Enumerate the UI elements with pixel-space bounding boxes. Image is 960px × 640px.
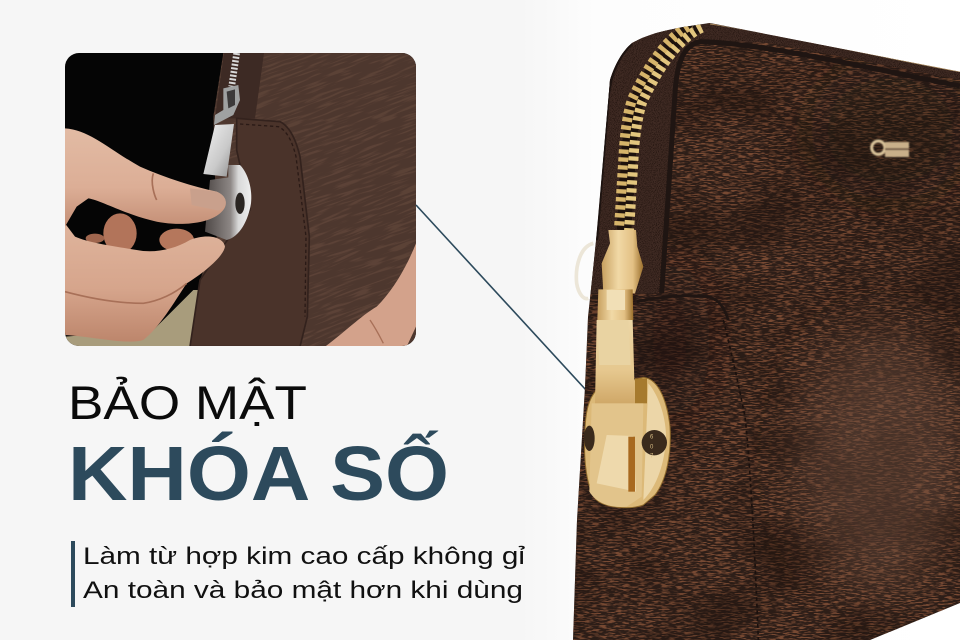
pocket seam	[637, 296, 728, 320]
description text: Làm từ hợp kim cao cấp không gỉ	[83, 543, 526, 570]
zipper tape	[590, 23, 960, 320]
dial: 6	[650, 434, 654, 440]
dial: 0	[650, 444, 654, 450]
accent bar	[71, 541, 75, 607]
dial	[642, 430, 667, 459]
fingers behind	[86, 213, 194, 253]
pull top	[597, 289, 633, 320]
right hand	[325, 243, 416, 347]
inset photo: hand opening the lock	[65, 53, 416, 346]
slider	[602, 230, 643, 293]
piping	[662, 42, 960, 293]
heading: KHÓA SỐ: KHÓA SỐ	[68, 430, 449, 517]
zipper teeth	[619, 25, 702, 232]
ring	[576, 243, 593, 299]
dial: 7	[650, 453, 654, 459]
logo	[872, 141, 909, 157]
lower hand	[65, 223, 225, 342]
bag	[560, 0, 960, 640]
description text: An toàn và bảo mật hơn khi dùng	[83, 577, 523, 604]
lock plate	[585, 377, 670, 508]
upper finger	[65, 128, 226, 227]
description text	[83, 543, 526, 604]
connector line	[416, 205, 586, 390]
pull and lock	[584, 320, 758, 640]
heading: BẢO MẬT: BẢO MẬT	[68, 376, 307, 429]
